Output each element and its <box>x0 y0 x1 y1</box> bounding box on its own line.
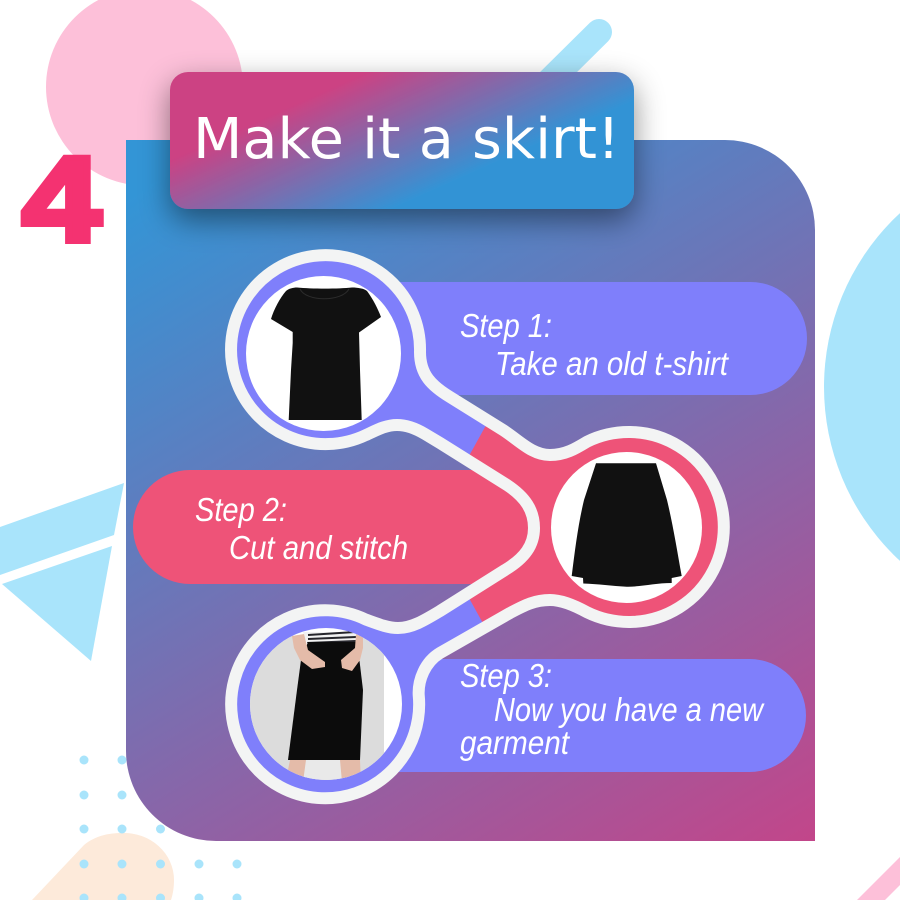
panel: gradient card <box>126 140 815 841</box>
step 3 pill <box>395 659 806 772</box>
step 2 text <box>195 491 408 566</box>
step 1 text <box>460 307 730 382</box>
step 1 text: Step 1: <box>460 307 552 344</box>
step 1 pill <box>395 282 807 395</box>
background: large blue circle <box>824 150 900 624</box>
step 1 text: Take an old t-shirt <box>495 345 730 382</box>
step 2 text: Step 2: <box>195 491 287 528</box>
step 3 text <box>460 657 765 761</box>
background: peach shape <box>32 833 174 900</box>
step 2 pill <box>133 470 534 584</box>
step 3 text: garment <box>460 724 571 761</box>
step 3 text: Now you have a new <box>494 691 765 728</box>
background: blue paper plane triangles <box>0 483 124 661</box>
background: pink circle <box>46 0 243 186</box>
background: dot grid <box>80 756 242 900</box>
number 4: 4 <box>22 131 101 267</box>
background: pink corner stripe <box>857 857 900 900</box>
step 3 text: Step 3: <box>460 657 552 694</box>
step 2 text: Cut and stitch <box>229 529 408 566</box>
connector: joined circles <box>231 255 724 798</box>
image: black skirt <box>551 452 702 603</box>
title banner <box>170 72 634 209</box>
background: blue stick <box>500 32 599 130</box>
title text: Make it a skirt! <box>193 107 620 172</box>
image: woman wearing the skirt <box>250 628 402 785</box>
image: black t-shirt <box>246 276 401 431</box>
